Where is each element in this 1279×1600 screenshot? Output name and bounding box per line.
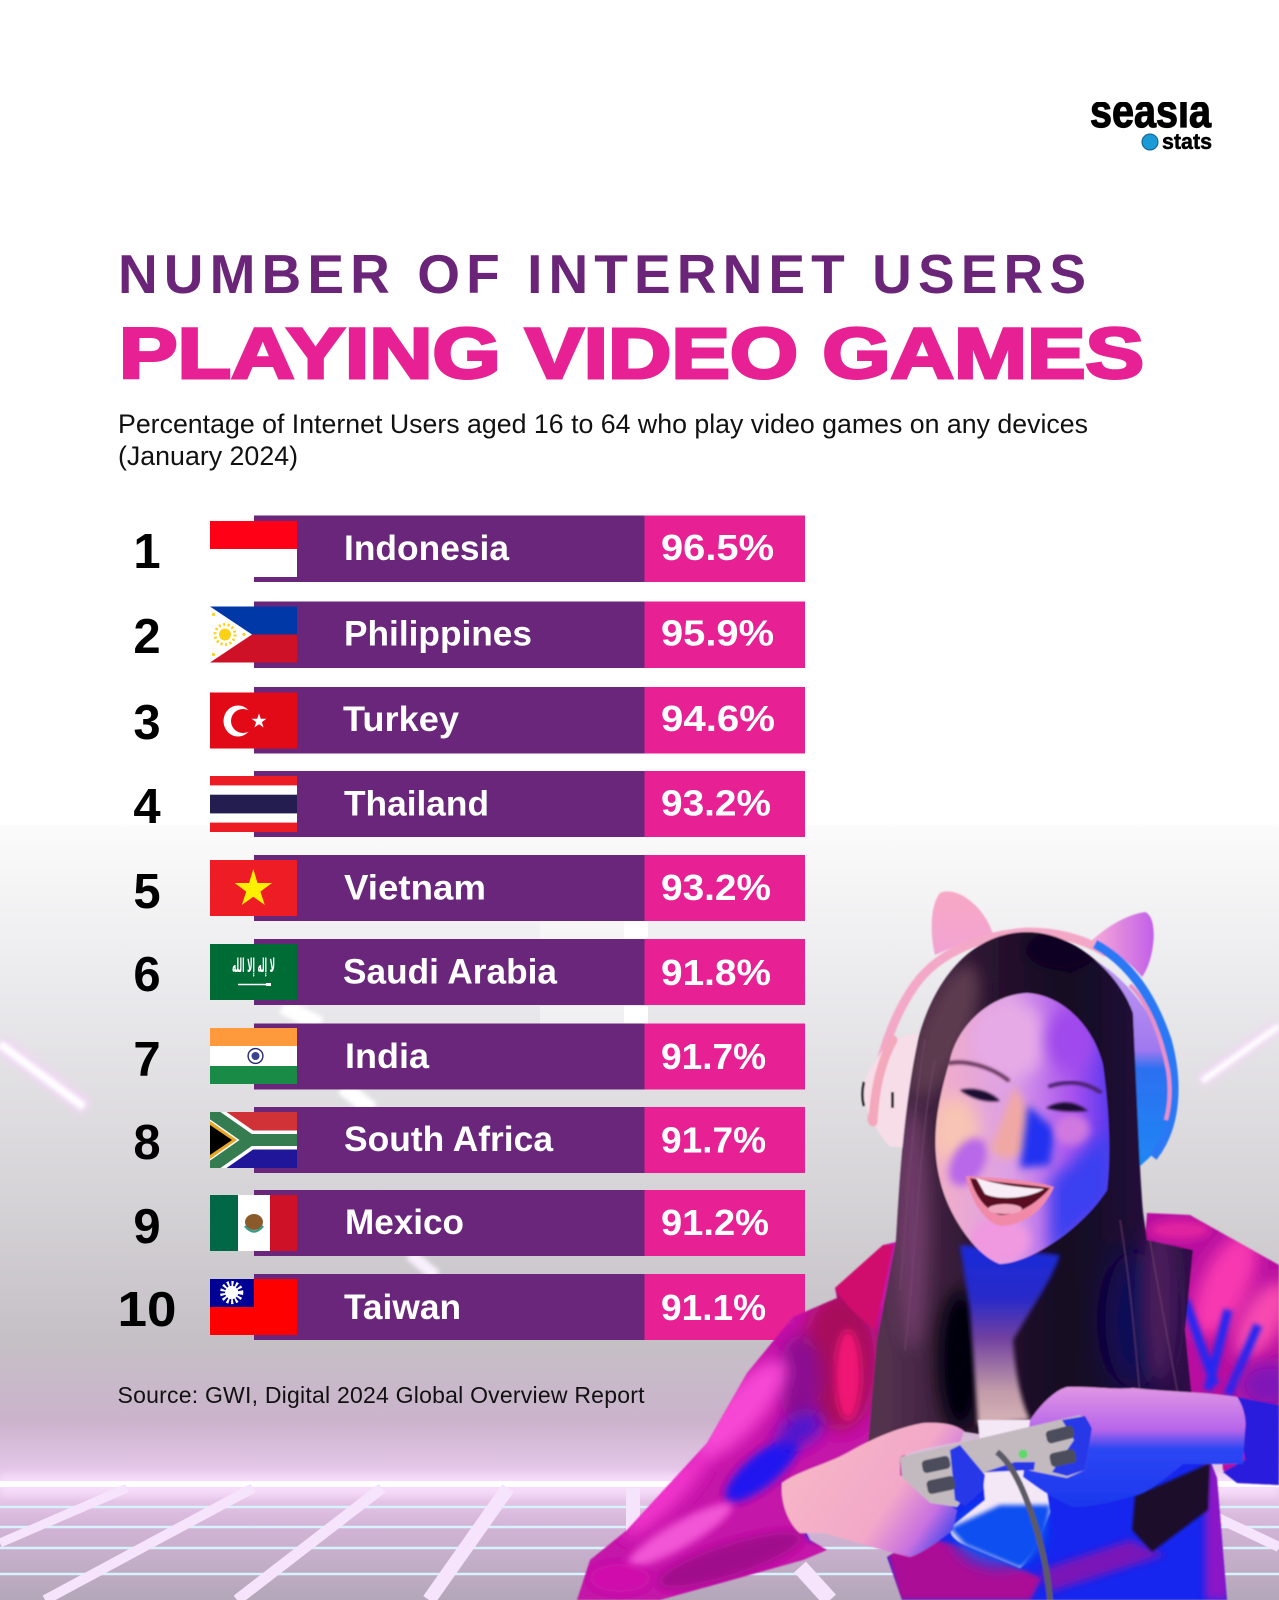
ranking row 4: Thailand — [133, 771, 805, 837]
ranking row 5: Vietnam: Vietnam — [344, 868, 486, 908]
ranking row 6: Saudi Arabia: 6 — [133, 948, 161, 1002]
ranking row 10: Taiwan: 10 — [118, 1283, 176, 1337]
ranking row 10: Taiwan — [118, 1274, 805, 1340]
flag: India — [210, 1028, 297, 1084]
jacket torso — [886, 1463, 1228, 1600]
flag: Turkey — [210, 692, 297, 748]
headset cat ears — [932, 891, 1154, 977]
ranking row 1: Indonesia: 1 — [133, 525, 161, 579]
hair below right hand — [1132, 1463, 1210, 1552]
logo: seasia stats: seasia — [1090, 85, 1211, 137]
ranking row 3: Turkey: Turkey — [343, 700, 460, 739]
ranking row 6: Saudi Arabia: Saudi Arabia — [343, 952, 558, 992]
ranking row 2: Philippines: 95.9% — [661, 612, 774, 654]
controller cable — [997, 1452, 1050, 1600]
smiling mouth — [966, 1176, 1054, 1226]
ranking row 9: Mexico: Mexico — [345, 1203, 464, 1242]
ranking row 4: Thailand: 4 — [133, 780, 161, 834]
headset right cup — [1095, 960, 1169, 1168]
flag: Indonesia — [210, 521, 297, 577]
jacket left arm and shoulder — [570, 1235, 910, 1600]
ranking row 3: Turkey — [133, 687, 805, 754]
flag: Mexico — [210, 1195, 297, 1251]
eyebrows and eyes — [950, 1062, 1100, 1112]
neon grid floor — [0, 1474, 1279, 1600]
ranking row 3: Turkey: 94.6% — [661, 698, 775, 739]
ranking row 10: Taiwan: Taiwan — [344, 1288, 461, 1327]
ranking row 2: Philippines — [133, 602, 805, 668]
ranking row 6: Saudi Arabia: 91.8% — [661, 952, 771, 993]
controller green light — [1018, 1450, 1028, 1458]
logo globe icon — [1142, 134, 1158, 150]
left hand — [782, 1423, 964, 1557]
ranking row 9: Mexico: 9 — [133, 1200, 161, 1254]
ranking row 10: Taiwan: 91.1% — [661, 1287, 766, 1328]
ranking row 8: South Africa: 8 — [133, 1116, 161, 1170]
ranking row 5: Vietnam — [133, 855, 805, 921]
ranking row 3: Turkey: 3 — [133, 696, 161, 750]
ranking row 1: Indonesia: Indonesia — [344, 529, 510, 568]
white undershirt and blue chest — [950, 1420, 1050, 1568]
ranking row 4: Thailand: Thailand — [344, 784, 489, 824]
ranking row 4: Thailand: 93.2% — [661, 782, 771, 824]
ranking row 5: Vietnam: 93.2% — [661, 867, 771, 908]
flag: Taiwan — [210, 1279, 297, 1335]
hair — [860, 925, 1200, 1455]
face — [934, 992, 1111, 1266]
flag: Saudi Arabia — [210, 944, 297, 1000]
title line 1: NUMBER OF INTERNET USERS — [118, 243, 1086, 305]
ranking row 1: Indonesia — [133, 516, 805, 582]
ranking row 2: Philippines: Philippines — [344, 614, 532, 654]
title line 2: PLAYING VIDEO GAMES — [119, 315, 1144, 394]
ranking row 9: Mexico: 91.2% — [661, 1202, 769, 1243]
flag: Vietnam — [210, 860, 297, 916]
flag: Thailand — [210, 776, 297, 832]
ranking row 7: India — [133, 1024, 805, 1090]
ranking row 5: Vietnam: 5 — [133, 865, 161, 919]
ranking row 8: South Africa — [133, 1107, 805, 1173]
neck and chest — [960, 1245, 1060, 1425]
ranking row 7: India: 91.7% — [661, 1036, 766, 1077]
ranking row 2: Philippines: 2 — [133, 610, 161, 664]
ranking row 7: India: 7 — [133, 1033, 161, 1087]
source note: Source: GWI, Digital 2024 Global Overview Report — [118, 1382, 645, 1408]
ranking row 9: Mexico — [133, 1190, 805, 1256]
subtitle — [118, 409, 1088, 471]
ranking row 6: Saudi Arabia — [133, 939, 805, 1005]
ranking row 8: South Africa: 91.7% — [661, 1120, 766, 1160]
logo: seasia stats: stats — [1162, 129, 1212, 154]
headset left cup — [862, 1033, 918, 1147]
photo illustration: woman gamer with cat-ear headset and controller — [570, 891, 1279, 1600]
jacket right sleeve — [1144, 1212, 1279, 1486]
headset band — [872, 932, 1174, 1157]
jacket cuff right — [1223, 1397, 1279, 1485]
logo: seasia stats — [1090, 102, 1212, 150]
subtitle: (January 2024) — [118, 441, 298, 471]
background neon light streaks — [0, 921, 1279, 1276]
flag: South Africa — [210, 1112, 297, 1168]
ranking row 8: South Africa: South Africa — [344, 1120, 554, 1159]
right hand — [1023, 1387, 1246, 1507]
ranking row 1: Indonesia: 96.5% — [661, 527, 774, 568]
subtitle: Percentage of Internet Users aged 16 to 64 who play video games on any devices — [118, 409, 1088, 439]
ranking row 7: India: India — [345, 1037, 430, 1076]
game controller — [900, 1415, 1092, 1600]
flag: Saudi Arabia: لا إله إلا الله — [232, 955, 275, 977]
jacket hood — [835, 1245, 893, 1330]
flag: Philippines — [210, 606, 297, 662]
